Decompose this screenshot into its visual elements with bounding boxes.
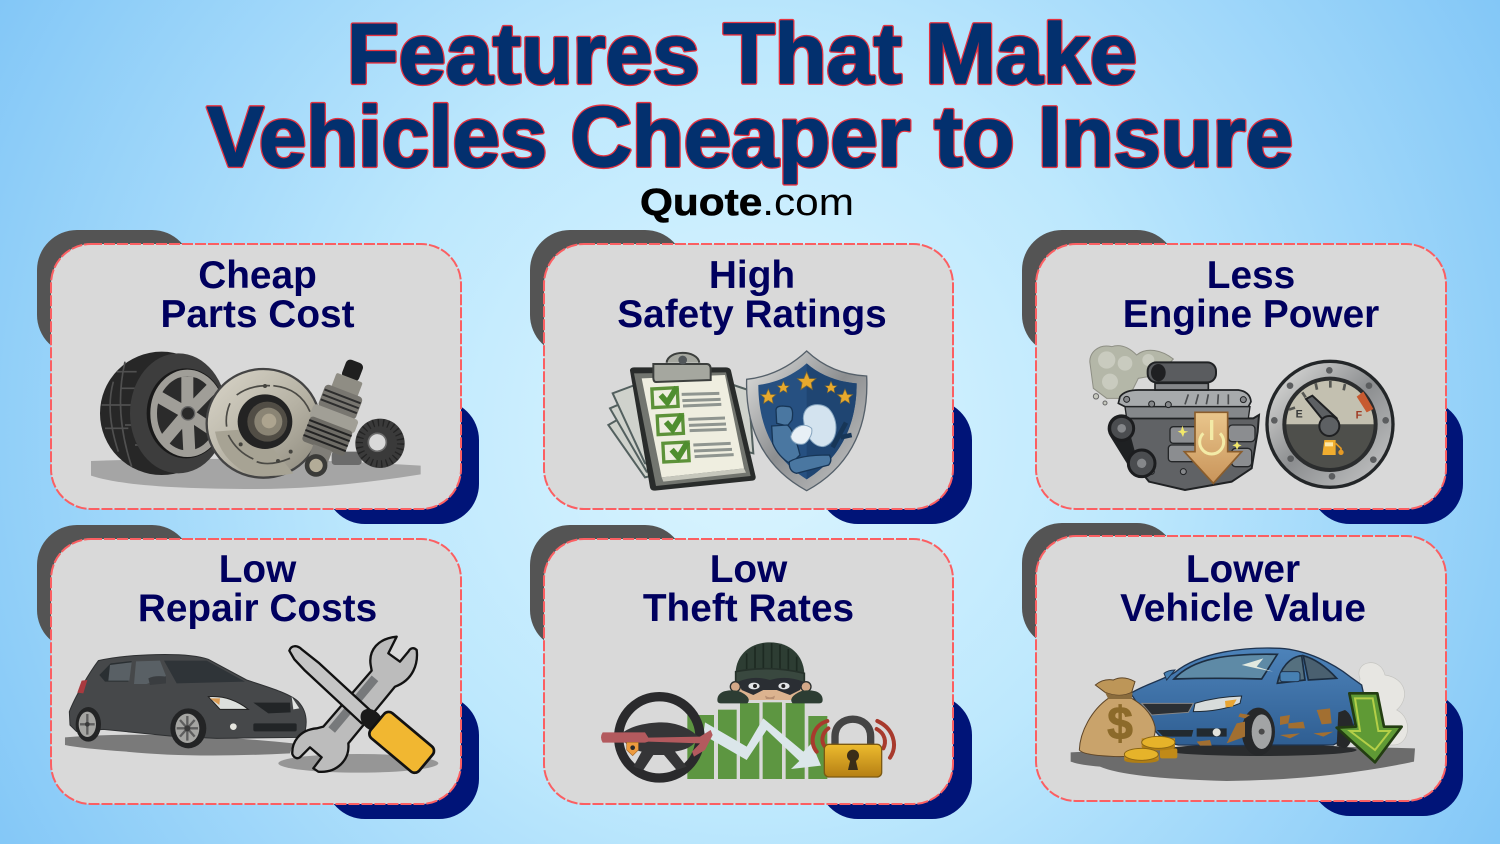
- heading: high safety ratings: High: [709, 254, 795, 297]
- heading: high safety ratings: Safety Ratings: [617, 293, 887, 336]
- title: Features That Make: [347, 7, 1137, 102]
- heading: low theft rates: Low: [710, 548, 788, 591]
- heading: low theft rates: Theft Rates: [643, 587, 854, 630]
- panel: lower vehicle value: [1022, 523, 1463, 816]
- brand logo: Quote.com: Quote .com: [640, 182, 854, 224]
- heading: less engine power: Engine Power: [1123, 293, 1379, 336]
- title: Features That Make: [347, 7, 1137, 102]
- heading: lower vehicle value: Lower: [1186, 548, 1300, 591]
- icon: engine with down arrow and fuel gauge: [1090, 346, 1395, 490]
- heading: cheap parts cost: Parts Cost: [160, 293, 355, 336]
- panel: low theft rates: [530, 525, 972, 819]
- heading: low repair costs: Repair Costs: [138, 587, 377, 630]
- icon: engine with down arrow and fuel gauge: E: [1296, 409, 1303, 421]
- icon: clipboard checklist and safety shield: [608, 351, 867, 491]
- panel: less engine power: [1022, 230, 1463, 524]
- title: Vehicles Cheaper to Insure: [207, 90, 1293, 185]
- icon: engine with down arrow and fuel gauge: F: [1356, 409, 1363, 421]
- title: [207, 7, 1293, 185]
- icon: rusty blue car, money bag, coins and down arrow: [1071, 648, 1415, 781]
- heading: cheap parts cost: Cheap: [198, 254, 317, 297]
- icon: grey hatchback car with crossed tools: [65, 637, 438, 775]
- panel: high safety ratings: [530, 230, 972, 524]
- panel: low repair costs: [37, 525, 479, 819]
- heading: lower vehicle value: Vehicle Value: [1120, 587, 1366, 630]
- icon: tire, brake disc, shock and wheel: [91, 352, 421, 489]
- heading: low repair costs: Low: [219, 548, 297, 591]
- panel: cheap parts cost: [37, 230, 479, 524]
- icon: rusty blue car, money bag, coins and down arrow: $: [1107, 697, 1133, 749]
- icon: steering lock, thief, falling chart and padlock: [601, 642, 894, 779]
- heading: less engine power: Less: [1207, 254, 1295, 297]
- title: Vehicles Cheaper to Insure: [207, 90, 1293, 185]
